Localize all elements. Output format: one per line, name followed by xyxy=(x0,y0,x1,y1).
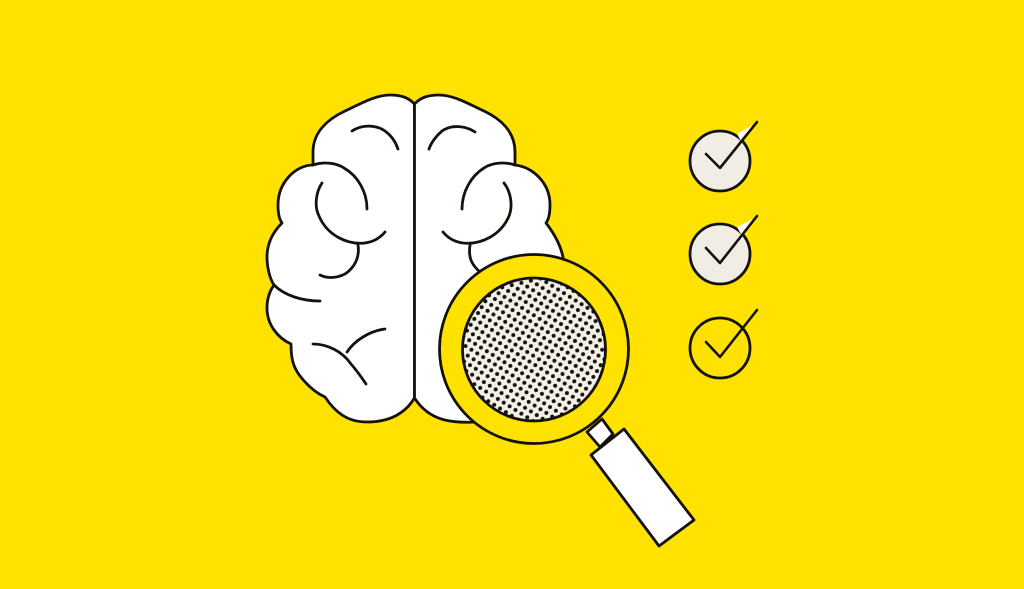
icon: magnifying glass xyxy=(440,254,694,546)
check item 2 xyxy=(690,216,757,284)
brain right hemisphere xyxy=(414,95,566,422)
right folds xyxy=(429,127,515,272)
check item 1 xyxy=(690,122,757,191)
checklist xyxy=(690,122,757,378)
magnifier yellow ring xyxy=(440,254,628,444)
brain left hemisphere xyxy=(267,95,414,422)
icon: brain xyxy=(267,95,566,422)
magnifier halftone lens xyxy=(462,278,606,421)
left folds xyxy=(274,126,398,384)
magnifier handle xyxy=(591,429,694,546)
magnifier neck xyxy=(587,419,613,447)
check item 3 xyxy=(690,310,757,378)
